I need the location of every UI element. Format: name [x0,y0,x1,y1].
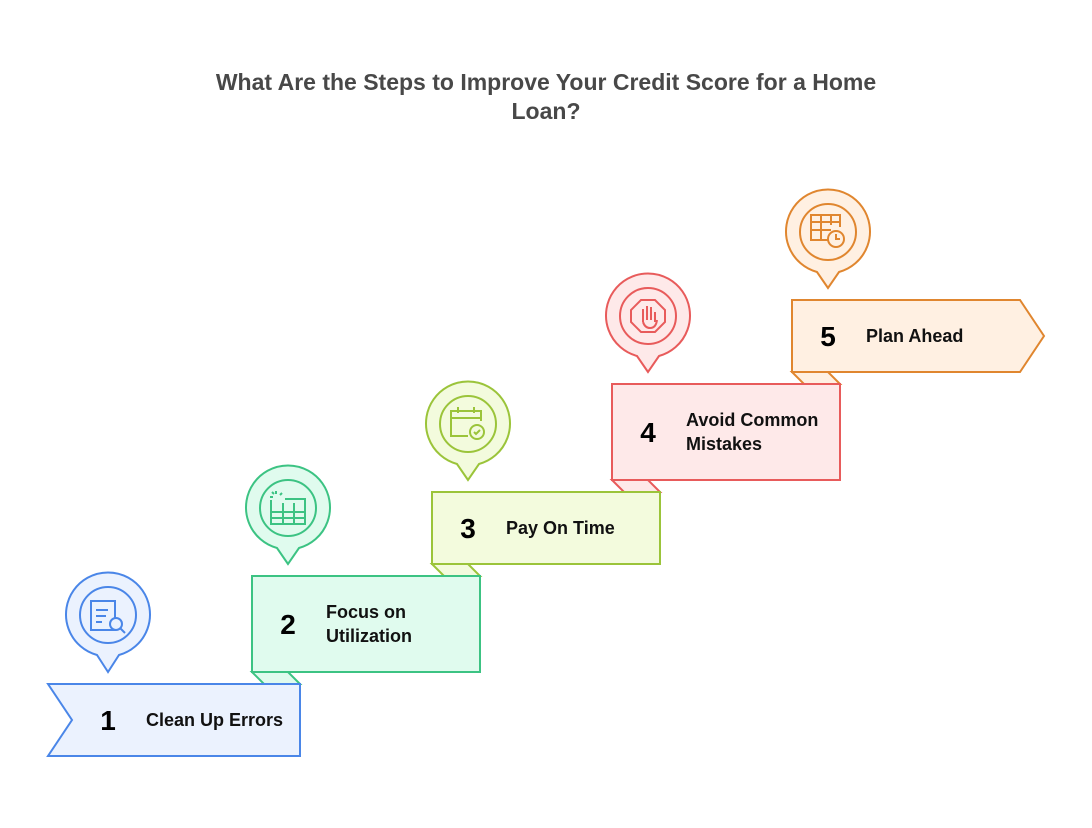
icon: stop hand pin [606,273,690,372]
title: What Are the Steps to Improve Your Credit Score for a Home [216,69,876,95]
step 3 [426,381,660,564]
step 4: 4 [640,417,656,448]
step 2: Focus on [326,602,406,622]
step 3: 3 [460,513,476,544]
title: Loan? [512,98,580,124]
step 5: 5 [820,321,836,352]
icon: calendar check pin [426,381,510,480]
step 2 [246,465,480,672]
step 2: Utilization [326,626,412,646]
title [216,69,876,124]
step 2: 2 [280,609,296,640]
step 1: Clean Up Errors [146,710,283,730]
step 5 [786,189,1044,372]
icon: clipboard search pin [66,572,150,672]
step 1: 1 [100,705,116,736]
icon: table pin [246,465,330,564]
step 4 [606,273,840,480]
step 3: Pay On Time [506,518,615,538]
step 1 [48,572,300,756]
step 4: Mistakes [686,434,762,454]
step 5: Plan Ahead [866,326,963,346]
step 4: Avoid Common [686,410,818,430]
icon: schedule pin [786,189,870,288]
